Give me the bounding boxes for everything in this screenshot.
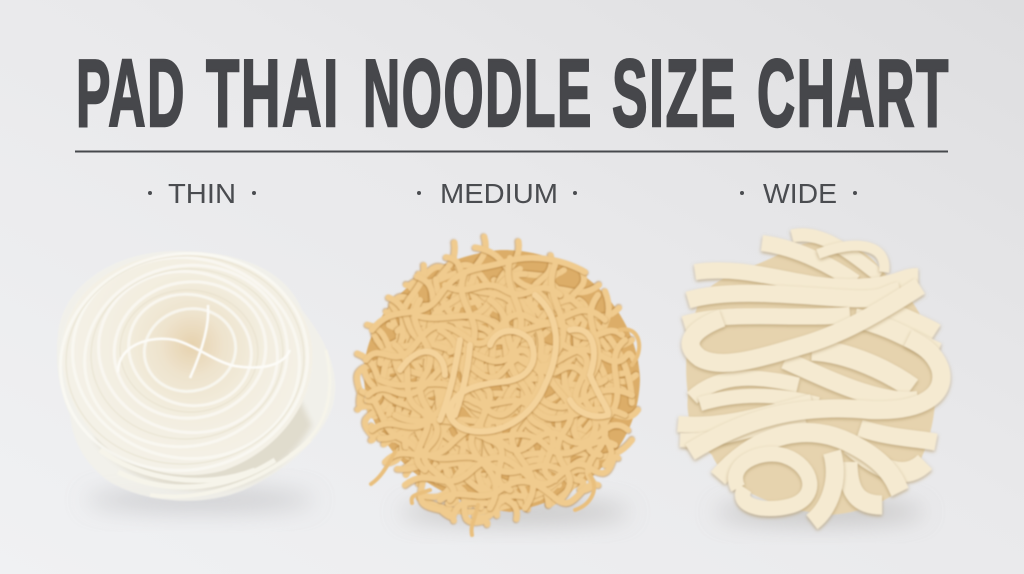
- label: thin: [148, 178, 256, 209]
- label: medium: MEDIUM: [440, 178, 558, 209]
- lower stacked strands: [95, 400, 312, 490]
- label: wide: [740, 178, 857, 209]
- label: wide: WIDE: [763, 178, 837, 209]
- label: thin: THIN: [168, 178, 236, 209]
- title divider: [75, 150, 948, 152]
- title: THAI: [206, 40, 340, 147]
- noodle nest: wide: [678, 235, 941, 524]
- stray strands: [371, 329, 639, 535]
- title: SIZE: [612, 40, 737, 147]
- title: PAD: [76, 40, 186, 147]
- noodle nest: medium: [318, 197, 671, 563]
- noodle nest: thin: [43, 234, 335, 512]
- title: [76, 40, 950, 147]
- title: NOODLE: [363, 40, 593, 147]
